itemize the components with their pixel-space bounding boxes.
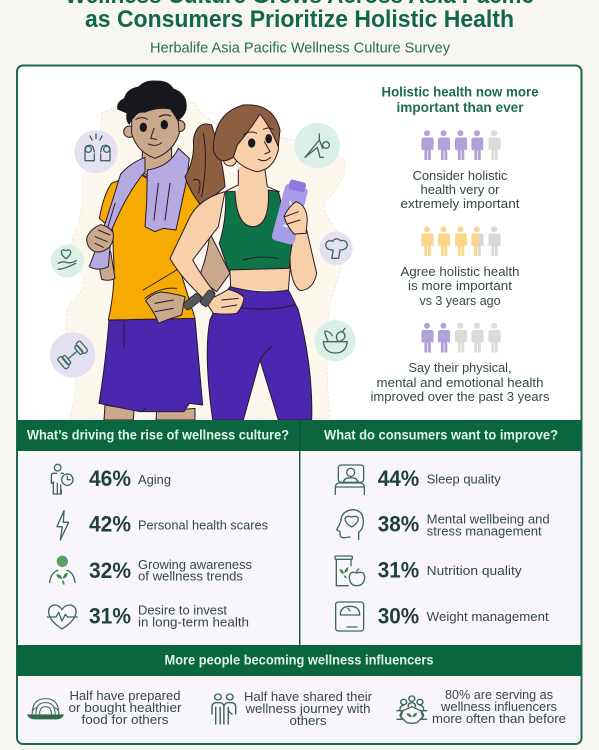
icon: bowl of noodles <box>27 699 64 719</box>
panel: influencers: 80% are serving as <box>445 687 553 702</box>
text: agree more important: vs 3 years ago <box>420 293 500 308</box>
panel: improvements: Mental wellbeing and <box>427 511 550 526</box>
section header band: drivers and improvements: What do consumers want to improve? <box>324 427 558 443</box>
panel: influencers: wellness journey with <box>244 701 370 716</box>
panel: drivers: Growing awareness <box>138 557 252 572</box>
icon: raised hands circle <box>74 130 118 173</box>
icon: broccoli circle <box>319 232 353 265</box>
pictogram: consider holistic health important <box>421 130 501 160</box>
title: as Consumers Prioritize Holistic Health <box>85 6 514 33</box>
panel: drivers: 42% <box>89 512 131 537</box>
text: agree more important: is more important <box>408 278 512 293</box>
panel: improvements: 30% <box>378 603 419 628</box>
text: consider holistic health important: health very or <box>420 182 500 197</box>
text: health improved: mental and emotional health <box>376 375 544 390</box>
pictogram: agree more important <box>421 226 501 256</box>
woman <box>170 105 317 420</box>
panel: influencers: more often than before <box>432 711 566 726</box>
panel: drivers <box>47 464 268 630</box>
text: consider holistic health important: extremely important <box>400 196 520 211</box>
text: consider holistic health important: Consider holistic <box>412 168 508 183</box>
icon: heart with pulse <box>47 605 77 629</box>
icon: two people together <box>212 694 236 724</box>
panel: influencers: or bought healthier <box>68 700 182 715</box>
panel: influencers: food for others <box>82 712 169 727</box>
man <box>87 80 230 420</box>
icon: sleep in bed <box>335 465 364 494</box>
icon: weighing scale <box>336 602 364 631</box>
panel: improvements: 31% <box>378 558 419 583</box>
panel: improvements: Sleep quality <box>427 471 501 486</box>
text: agree more important: Agree holistic health <box>400 264 520 279</box>
panel: drivers: Desire to invest <box>138 602 227 617</box>
icon: person with leaf <box>50 556 75 585</box>
icon: group of influencers with leaf badge <box>397 696 427 723</box>
panel: drivers: 32% <box>89 558 131 583</box>
panel: drivers: 46% <box>89 466 131 491</box>
subtitle: Herbalife Asia Pacific Wellness Culture Survey <box>150 40 450 56</box>
section header band: influencers: More people becoming wellness influencers <box>164 651 434 667</box>
icon: head with heart <box>337 510 363 540</box>
panel: influencers: Half have shared their <box>244 689 373 704</box>
illustration: two people with wellness icons <box>50 80 356 420</box>
panel: influencers: Half have prepared <box>70 688 180 703</box>
heading: holistic health <box>382 84 539 115</box>
icon: yoga pose circle <box>295 123 340 168</box>
heading: holistic health: important than ever <box>396 100 524 115</box>
icon: dumbbell circle <box>50 332 95 378</box>
section header band: influencers <box>17 645 581 676</box>
panel: drivers: in long-term health <box>138 615 249 630</box>
icon: aging person with clock <box>51 464 73 494</box>
panel: drivers: Aging <box>138 472 171 487</box>
icon: caring hand circle <box>51 244 84 278</box>
panel: influencers <box>27 687 566 728</box>
panel: drivers: of wellness trends <box>138 569 243 584</box>
panel: influencers: others <box>290 713 327 728</box>
text: health improved: improved over the past 3 years <box>370 389 550 404</box>
dashed cream backdrop <box>66 98 347 418</box>
section header band: drivers and improvements: What’s driving the rise of wellness culture? <box>27 427 289 443</box>
icon: supplement jar and apple <box>335 556 365 586</box>
panel: drivers: Personal health scares <box>138 518 268 532</box>
panel: improvements: Nutrition quality <box>427 563 522 578</box>
panel: improvements <box>335 465 550 631</box>
section header band: drivers and improvements <box>17 420 581 451</box>
man's hair <box>117 80 187 125</box>
icon: lightning bolt <box>57 511 69 540</box>
icon: salad bowl circle <box>314 320 356 361</box>
panel: drivers: 31% <box>89 604 131 629</box>
panel: influencers: wellness influencers <box>440 699 557 714</box>
text: health improved: Say their physical, <box>408 360 512 375</box>
panel: improvements: stress management <box>427 524 542 539</box>
panel: improvements: Weight management <box>427 609 549 624</box>
pictogram: health improved <box>421 323 501 352</box>
heading: holistic health: Holistic health now more <box>382 84 539 100</box>
panel: improvements: 44% <box>378 466 419 491</box>
panel: improvements: 38% <box>378 512 419 537</box>
